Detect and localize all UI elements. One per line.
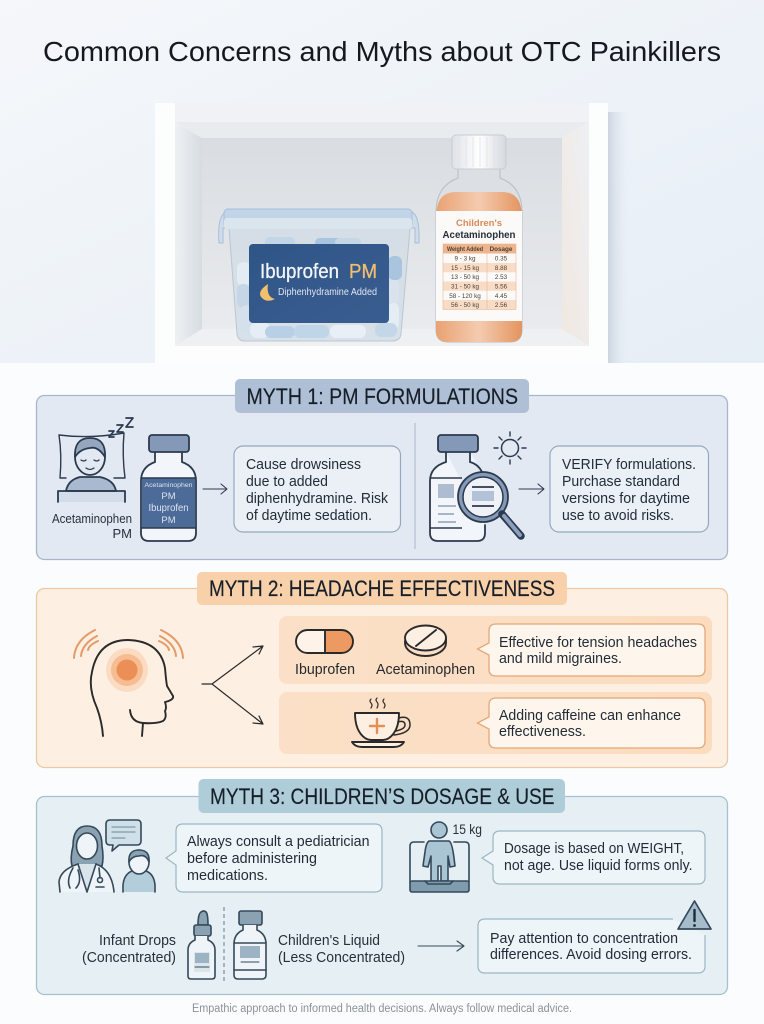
icon: children's liquid bottle [234, 911, 266, 979]
callout: caffeine: effectiveness. [499, 723, 586, 740]
icon: child on scale [410, 822, 469, 892]
callout: consult pediatrician: Always consult a pediatrician [187, 833, 370, 850]
text box: drowsiness [234, 446, 400, 532]
label: acetaminophen PM [52, 511, 132, 541]
dosage table: 5.56 [495, 284, 508, 290]
dosage table: 2.53 [495, 274, 508, 281]
label: children's liquid: (Less Concentrated) [278, 949, 405, 966]
callout: consult pediatrician [166, 824, 382, 892]
dosage table [443, 244, 516, 310]
text box: drowsiness: Cause drowsiness [246, 456, 361, 473]
label: acetaminophen PM: PM [112, 526, 132, 541]
label: ibuprofen: Ibuprofen [295, 662, 355, 678]
panel: myth 1 [36, 379, 728, 560]
arrows: branching [202, 646, 263, 724]
dosage table: 56 - 50 kg [451, 302, 479, 309]
icon: sleeping person [58, 418, 133, 502]
illustration: medicine shelf [155, 103, 630, 363]
text box: drowsiness: due to added [246, 473, 328, 490]
bottle: children's acetaminophen: Acetaminophen [442, 230, 516, 241]
callout: consult pediatrician: medications. [187, 867, 268, 884]
row: pain relievers [279, 616, 712, 684]
icon: PM bottle [141, 435, 196, 541]
dosage table: 8.88 [495, 265, 508, 272]
callout: dosage by weight [482, 831, 705, 884]
callout: consult pediatrician: before administering [187, 850, 317, 867]
text box: verify: versions for daytime [562, 490, 690, 507]
panel: myth 2 [36, 572, 728, 768]
label: acetaminophen PM: Acetaminophen [52, 511, 132, 526]
callout: caffeine: Adding caffeine can enhance [499, 707, 681, 724]
title: Common Concerns and Myths about OTC Painkillers [43, 36, 721, 67]
heading: myth 3: MYTH 3: CHILDREN’S DOSAGE & USE [210, 784, 554, 809]
dosage table: Dosage [490, 246, 513, 253]
dosage table: 15 - 15 kg [451, 265, 479, 272]
label: children's liquid: Children's Liquid [278, 932, 380, 949]
heading: myth 1: MYTH 1: PM FORMULATIONS [246, 384, 518, 409]
heading: myth 2 [197, 572, 567, 605]
icon: infant drops bottle [188, 911, 215, 979]
heading: myth 2: MYTH 2: HEADACHE EFFECTIVENESS [209, 576, 555, 601]
bottle: children's acetaminophen: Children's [456, 218, 502, 229]
dosage table: 31 - 50 kg [451, 284, 479, 290]
dosage table: 2.56 [495, 302, 508, 309]
top illustration backdrop [0, 0, 764, 363]
icon: doctor and child [59, 820, 155, 892]
footer note: Empathic approach to informed health decisions. Always follow medical advice. [192, 1003, 572, 1015]
label: infant drops: (Concentrated) [82, 949, 176, 966]
label: ibuprofen PM: PM [349, 261, 377, 283]
icon: coffee cup [352, 698, 410, 747]
label: children's liquid [278, 932, 405, 966]
icon: PM bottle: Acetaminophen [144, 482, 193, 489]
callout: concentration warning: Pay attention to concentration [490, 930, 678, 947]
label: ibuprofen PM: Diphenhydramine Added [278, 286, 377, 298]
heading: myth 3 [198, 779, 565, 813]
text box: verify [550, 446, 708, 532]
callout: caffeine [478, 698, 705, 748]
label: ibuprofen PM [249, 244, 389, 323]
callout: dosage by weight: not age. Use liquid forms only. [504, 857, 692, 874]
panel: myth 3 [36, 779, 728, 994]
container: ibuprofen PM tub [219, 209, 419, 341]
dosage table: 58 - 120 kg [449, 293, 481, 300]
icon: PM bottle: PM [161, 515, 176, 526]
dosage table: 13 - 50 kg [451, 274, 479, 281]
label: infant drops [82, 932, 176, 966]
row: caffeine [279, 692, 712, 754]
icon: tablet [405, 626, 446, 656]
text box: verify: VERIFY formulations. [562, 456, 696, 473]
icon: warning triangle [678, 901, 711, 929]
label: acetaminophen: Acetaminophen [376, 662, 475, 678]
label: 15 kg: 15 kg [452, 822, 482, 837]
callout: tension headaches [478, 624, 705, 676]
text box: drowsiness: diphenhydramine. Risk [246, 490, 388, 507]
icon: capsule [296, 630, 353, 653]
callout: tension headaches: and mild migraines. [499, 650, 622, 667]
heading: myth 1 [235, 379, 529, 413]
label: infant drops: Infant Drops [99, 932, 176, 949]
icon: PM bottle: PM [161, 491, 176, 502]
arrow [203, 484, 227, 494]
dosage table: 9 - 3 kg [454, 256, 476, 262]
label: ibuprofen PM: Ibuprofen [260, 261, 339, 283]
bottle: children's acetaminophen [436, 135, 522, 342]
callout: concentration warning [478, 919, 705, 973]
callout: tension headaches: Effective for tension headaches [499, 634, 697, 651]
icon: bottle with magnifier and sun [430, 432, 526, 541]
arrow [519, 484, 544, 494]
callout: concentration warning: differences. Avoid dosing errors. [490, 946, 692, 963]
text box: verify: Purchase standard [562, 473, 680, 490]
dosage table: 0.35 [495, 256, 508, 262]
dosage table: 4.45 [495, 293, 508, 300]
callout: dosage by weight: Dosage is based on WEIGHT, [504, 840, 684, 857]
icon: head with headache [74, 630, 183, 736]
arrow [418, 941, 464, 951]
icon: PM bottle: Ibuprofen [148, 503, 188, 514]
dosage table: Weight Added [447, 246, 483, 253]
text box: drowsiness: of daytime sedation. [246, 507, 372, 524]
text box: verify: use to avoid risks. [562, 507, 674, 524]
